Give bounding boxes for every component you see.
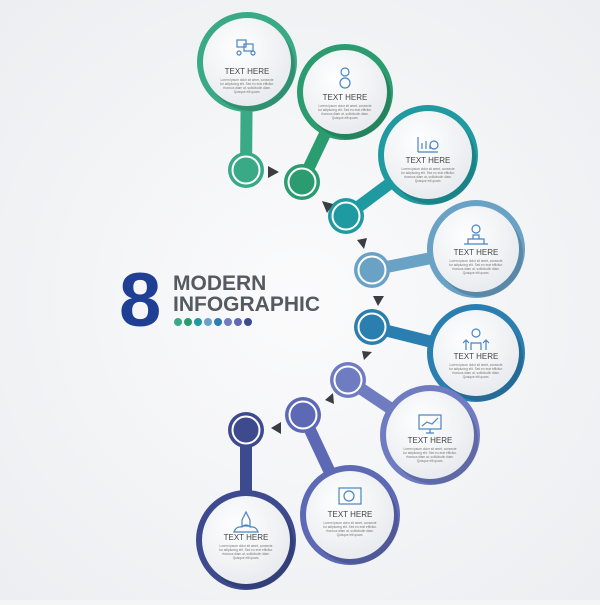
step circles: TEXT HERE (225, 67, 269, 76)
step circles: Quisque elit quam. (234, 90, 260, 94)
step circles: Lorem ipsum dolor sit amet, consecte (404, 447, 457, 451)
step circles: tur adipiscing elit. Sed eu erat efficitur. (219, 548, 273, 552)
step circles: tur adipiscing elit. Sed eu erat efficitur. (323, 525, 377, 529)
step circles: tur adipiscing elit. Sed eu erat efficitur. (403, 451, 457, 455)
step circles: TEXT HERE (224, 533, 268, 542)
step circles: tur adipiscing elit. Sed eu erat efficitur. (318, 108, 372, 112)
step circles: TEXT HERE (454, 248, 498, 257)
step circles: tur adipiscing elit. Sed eu erat efficitur. (449, 263, 503, 267)
title block (119, 258, 320, 343)
step circles: rhoncus diam at, sollicitudin diam. (452, 371, 500, 375)
step circles: rhoncus diam at, sollicitudin diam. (406, 455, 454, 459)
step circles: Quisque elit quam. (337, 533, 363, 537)
step circles: TEXT HERE (328, 510, 372, 519)
step circles: Lorem ipsum dolor sit amet, consecte (450, 363, 503, 367)
step circles: TEXT HERE (454, 352, 498, 361)
step circles: rhoncus diam at, sollicitudin diam. (452, 267, 500, 271)
step circles: Lorem ipsum dolor sit amet, consecte (319, 104, 372, 108)
step circles: rhoncus diam at, sollicitudin diam. (404, 175, 452, 179)
step circles: Lorem ipsum dolor sit amet, consecte (324, 521, 377, 525)
step circles: tur adipiscing elit. Sed eu erat efficitur. (401, 171, 455, 175)
step circles: Quisque elit quam. (415, 179, 441, 183)
step circles: Quisque elit quam. (463, 271, 489, 275)
step circles: rhoncus diam at, sollicitudin diam. (223, 86, 271, 90)
title block: MODERN (173, 272, 266, 295)
arrows (268, 166, 384, 434)
step circles: rhoncus diam at, sollicitudin diam. (321, 112, 369, 116)
title block: INFOGRAPHIC (173, 293, 320, 316)
step circles: TEXT HERE (323, 93, 367, 102)
step circles: Lorem ipsum dolor sit amet, consecte (221, 78, 274, 82)
step circles (196, 12, 525, 590)
step circles: rhoncus diam at, sollicitudin diam. (222, 552, 270, 556)
step circles: Quisque elit quam. (332, 116, 358, 120)
step circles: Lorem ipsum dolor sit amet, consecte (220, 544, 273, 548)
step circles: TEXT HERE (406, 156, 450, 165)
step circles: Lorem ipsum dolor sit amet, consecte (450, 259, 503, 263)
title block: 8 (119, 258, 161, 343)
step circles: tur adipiscing elit. Sed eu erat efficitur. (220, 82, 274, 86)
step circles: Quisque elit quam. (233, 556, 259, 560)
nodes (228, 152, 390, 448)
step circles: Quisque elit quam. (417, 459, 443, 463)
step circles: Lorem ipsum dolor sit amet, consecte (402, 167, 455, 171)
step circles: TEXT HERE (408, 436, 452, 445)
step circles: Quisque elit quam. (463, 375, 489, 379)
step circles: tur adipiscing elit. Sed eu erat efficitur. (449, 367, 503, 371)
step circles: rhoncus diam at, sollicitudin diam. (326, 529, 374, 533)
connectors (246, 62, 476, 540)
